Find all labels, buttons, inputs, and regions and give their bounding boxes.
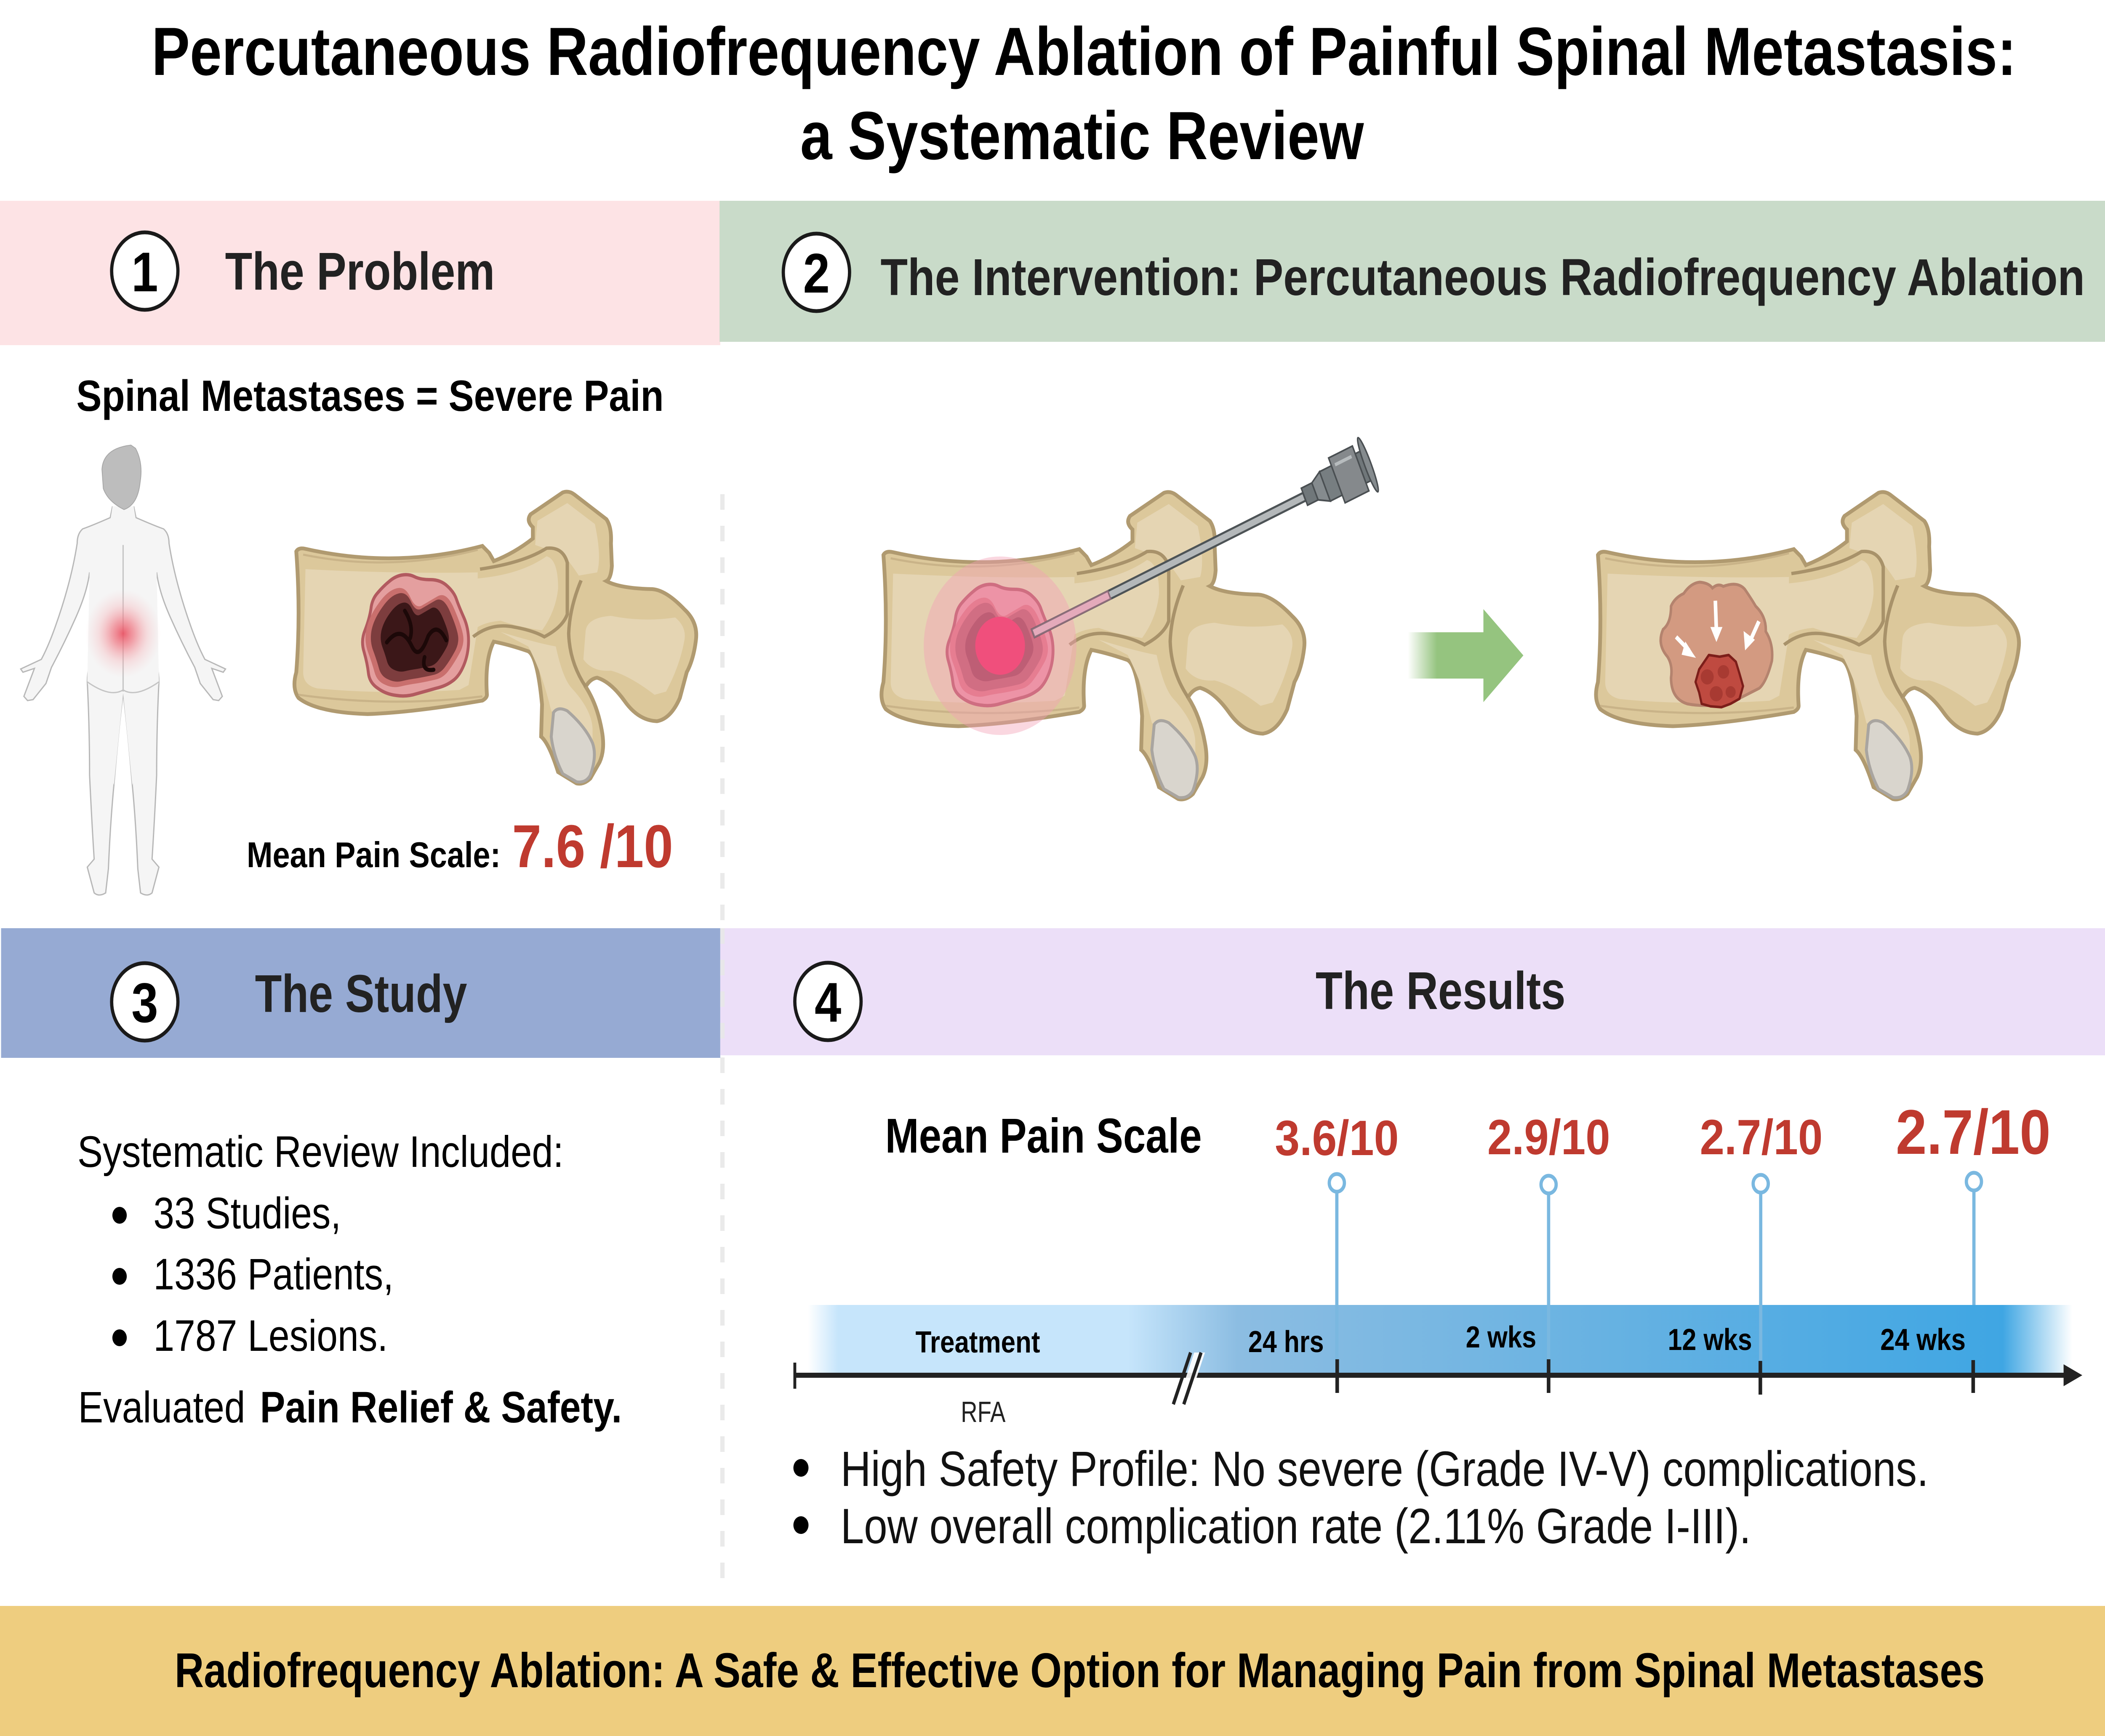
step badge 3: 3 — [131, 972, 158, 1034]
heading: the study: The Study — [255, 964, 467, 1023]
timeline chart: RFA — [961, 1395, 1006, 1428]
step badge 1 — [112, 232, 178, 310]
study text block: 1787 Lesions. — [153, 1311, 388, 1361]
safety bullets: Low overall complication rate (2.11% Grade I-III). — [841, 1499, 1751, 1554]
illustration: vertebra with metastatic tumor — [294, 492, 696, 784]
timeline chart — [795, 1173, 2082, 1428]
conclusion banner: Radiofrequency Ablation: A Safe & Effective Option for Managing Pain from Spinal Metastases — [175, 1643, 1985, 1698]
heading: the problem: The Problem — [225, 242, 495, 301]
safety bullets: High Safety Profile: No severe (Grade IV-V) complications. — [841, 1442, 1929, 1497]
timeline chart: 24 hrs — [1248, 1325, 1324, 1359]
heading: the intervention: The Intervention: Percutaneous Radiofrequency Ablation — [881, 248, 2085, 306]
panel: the intervention — [719, 201, 2105, 799]
conclusion banner — [0, 1606, 2105, 1736]
timeline chart: 12 wks — [1668, 1323, 1752, 1357]
values: pain scale over time: 2.7/10 — [1700, 1110, 1823, 1165]
title — [152, 13, 2017, 173]
timeline chart: 2 wks — [1466, 1321, 1536, 1354]
title: a Systematic Review — [800, 98, 1364, 173]
panel: the results — [720, 928, 2105, 1554]
study text block: Systematic Review Included: — [77, 1127, 564, 1177]
icon: human body with back pain — [21, 445, 226, 895]
values: pain scale over time: 2.9/10 — [1487, 1110, 1610, 1165]
timeline chart: 24 wks — [1880, 1323, 1966, 1357]
icon: shrink arrows — [1676, 601, 1759, 658]
stat: mean pain scale 7.6: 7.6 /10 — [512, 813, 673, 880]
subheading: spinal metastases: Spinal Metastases = Severe Pain — [76, 371, 664, 421]
arrow: treatment to outcome — [1408, 609, 1523, 702]
values: pain scale over time — [1275, 1097, 2051, 1167]
step badge 4 — [795, 963, 861, 1040]
safety bullets — [794, 1442, 1929, 1554]
step badge 1: 1 — [131, 241, 158, 304]
timeline chart: Treatment — [916, 1326, 1040, 1359]
step badge 2 — [783, 234, 850, 311]
study text block — [77, 1127, 622, 1432]
stat: mean pain scale 7.6: Mean Pain Scale: — [247, 835, 501, 875]
values: pain scale over time: 3.6/10 — [1275, 1111, 1399, 1166]
icon: ablation needle — [1023, 436, 1381, 660]
illustration: vertebra with shrunken tumor — [1596, 492, 2019, 799]
values: pain scale over time: 2.7/10 — [1896, 1097, 2051, 1167]
study text block: 33 Studies, — [153, 1188, 341, 1238]
illustration: vertebra with ablation probe — [882, 436, 1381, 799]
panel: the study — [1, 928, 720, 1432]
step badge 2: 2 — [803, 242, 830, 305]
stat: mean pain scale 7.6 — [247, 813, 673, 880]
study text block: 1336 Patients, — [153, 1249, 394, 1299]
step badge 4: 4 — [815, 972, 841, 1034]
heading: the results: The Results — [1316, 961, 1566, 1020]
step badge 3 — [112, 963, 178, 1041]
panel: the problem — [0, 201, 720, 895]
study text block: Pain Relief & Safety. — [260, 1382, 622, 1432]
study text block: Evaluated — [78, 1382, 245, 1432]
title: Percutaneous Radiofrequency Ablation of Painful Spinal Metastasis: — [152, 13, 2017, 89]
label: mean pain scale: Mean Pain Scale — [885, 1108, 1202, 1163]
